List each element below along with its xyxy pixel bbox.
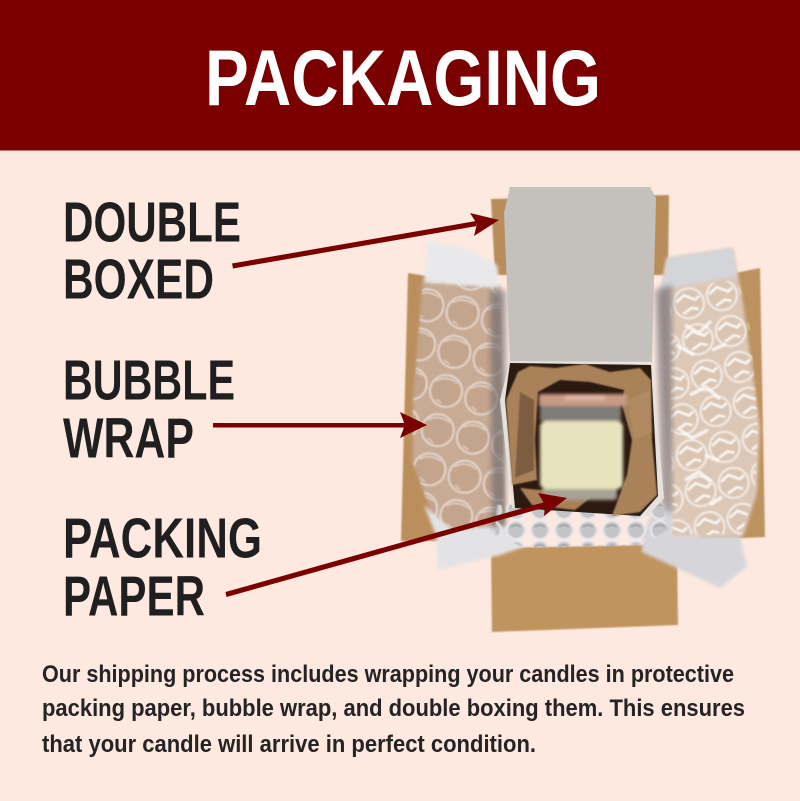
arrow to packing paper [226,493,567,597]
gray inner box lid [504,187,656,362]
inner box interior [500,360,664,516]
bottom bubble wrap [495,497,668,547]
label: double boxed: DOUBLE [63,190,241,254]
photo: opened shipping box with candle [401,187,765,632]
label: packing paper: PAPER [63,564,205,628]
packing paper [506,364,657,516]
candle jar [539,394,627,500]
label: double boxed: BOXED [63,248,214,310]
label: bubble wrap: WRAP [63,406,194,470]
label: packing paper: PACKING [63,506,262,570]
label: bubble wrap: BUBBLE [63,348,235,412]
arrow to bubble wrap [213,412,427,438]
title: PACKAGING [205,33,601,122]
header banner [0,0,800,150]
right bubble wrap [642,248,760,588]
arrow to double box [232,213,499,268]
outer box flaps [401,195,765,632]
highlights on right wrap [676,321,726,505]
description paragraph: that your candle will arrive in perfect condition. [42,731,536,758]
left bubble wrap [413,241,523,570]
